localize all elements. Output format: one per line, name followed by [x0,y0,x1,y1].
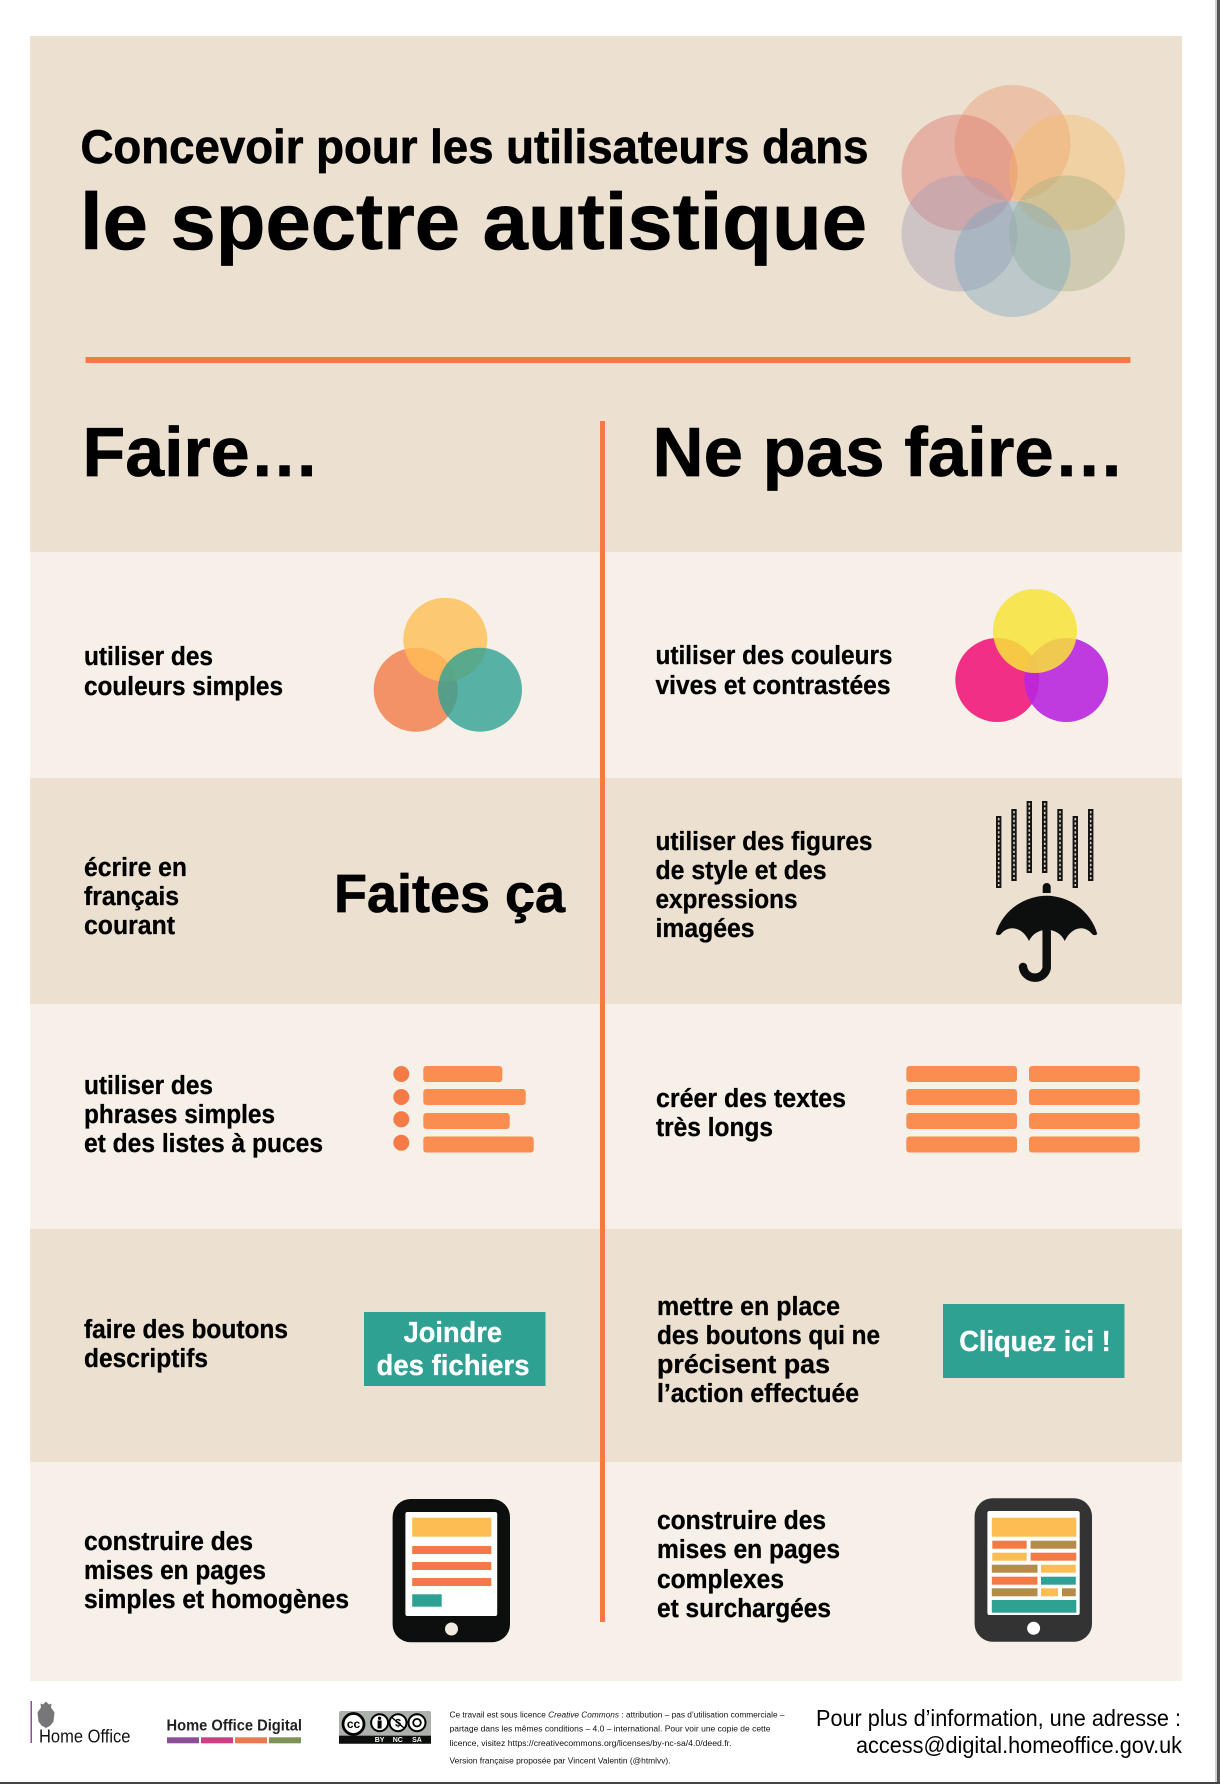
licence text: Ce travail est sous licence Creative Commons : attribution – pas d’utilisation commerciale – [450,1710,785,1719]
badge: Creative Commons licence [339,1711,431,1744]
icon: tablet with simple layout [393,1499,510,1642]
vertical orange divider [600,421,605,1622]
text: complex layouts: mises en pages [657,1536,840,1564]
icon: muted colour circles [374,598,522,732]
icon: tablet with cluttered layout [975,1498,1092,1642]
text: vague buttons: des boutons qui ne [657,1322,880,1350]
text: complex layouts: et surchargées [657,1595,831,1623]
text: plain French: courant [84,912,175,940]
icon: crest [38,1702,54,1728]
text: bright contrasting colours: vives et contrastées [656,672,890,700]
icon: bullet list [393,1066,534,1152]
text: short sentences and bullets: et des listes à puces [84,1130,323,1158]
icon: flower of overlapping circles [902,85,1125,317]
panel: header background [30,36,1182,552]
horizontal orange divider [86,357,1130,363]
logo: Home Office Digital: Home Office Digital [166,1718,302,1734]
text: simple layouts [84,1528,349,1614]
text: vague buttons: mettre en place [657,1293,840,1321]
icon: bright colour circles [955,589,1108,722]
text: simple layouts: construire des [84,1528,253,1556]
heading: Ne pas faire: Ne pas faire… [652,413,1124,491]
text: descriptive buttons: descriptifs [84,1345,208,1373]
title: Concevoir pour les utilisateurs dans [80,120,868,173]
panel: row 2 background [30,778,1182,1004]
text: simple layouts: simples et homogènes [84,1586,349,1614]
button: vague example: Cliquez ici ! [959,1326,1111,1358]
panel: row 1 background [30,552,1182,778]
text: plain French: français [84,883,179,911]
text: simple colours [84,643,283,701]
text: vague buttons: précisent pas [657,1351,830,1379]
text: short sentences and bullets: utiliser des [84,1072,213,1100]
text: very long texts [656,1085,846,1142]
licence text: partage dans les mêmes conditions – 4.0 – international. Pour voir une copie de cette [450,1725,771,1734]
text: figures of speech: utiliser des figures [656,828,872,856]
contact information: access@digital.homeoffice.gov.uk [856,1732,1182,1758]
badge: Creative Commons licence: BY [375,1737,385,1744]
text: complex layouts: construire des [657,1507,826,1535]
badge: Creative Commons licence: $ [395,1718,401,1730]
text: plain French: écrire en [84,854,187,882]
text: simple colours: utiliser des [84,643,213,671]
badge: Creative Commons licence: NC [393,1737,403,1744]
text: vague buttons [657,1293,880,1408]
licence text: licence, visitez https://creativecommons.org/licenses/by-nc-sa/4.0/deed.fr. [450,1739,732,1748]
panel: row 5 background [30,1462,1182,1681]
panel: row 4 background [30,1229,1182,1462]
button: descriptive example: Joindre [404,1317,502,1349]
licence text: Version française proposée par Vincent Valentin (@htmlvv). [450,1756,670,1766]
text: complex layouts [657,1507,840,1623]
logo: Home Office Digital [166,1718,302,1743]
text: descriptive buttons [84,1316,288,1373]
title: le spectre autistique [80,177,867,266]
text: very long texts: très longs [656,1114,773,1142]
logo: Home Office [30,1701,130,1746]
button: vague example [943,1304,1124,1378]
text: simple colours: couleurs simples [84,673,283,701]
badge: Creative Commons licence: cc [347,1717,360,1731]
example: plain wording: Faites ça [334,864,566,924]
badge: Creative Commons licence: SA [412,1737,422,1744]
heading: Faire: Faire… [82,413,320,491]
text: complex layouts: complexes [657,1566,784,1594]
contact information [816,1705,1182,1758]
licence text [450,1710,785,1766]
panel: row 3 background [30,1004,1182,1229]
icon: two blocks of long text bars [906,1066,1140,1152]
text: figures of speech [656,828,872,943]
text: figures of speech: expressions [656,886,798,914]
icon: raining umbrella [996,801,1097,978]
text: plain French [84,854,187,940]
text: vague buttons: l’action effectuée [657,1380,859,1408]
button: descriptive example: des fichiers [376,1350,530,1382]
text: descriptive buttons: faire des boutons [84,1316,288,1344]
text: figures of speech: de style et des [656,857,826,885]
title [80,120,868,266]
text: simple layouts: mises en pages [84,1557,266,1585]
logo: Home Office: Home Office [39,1726,130,1746]
text: figures of speech: imagées [656,915,754,943]
text: bright contrasting colours: utiliser des couleurs [656,642,892,670]
text: very long texts: créer des textes [656,1085,846,1113]
text: short sentences and bullets [84,1072,323,1158]
button: descriptive example [364,1312,546,1386]
text: bright contrasting colours [656,642,892,700]
text: short sentences and bullets: phrases simples [84,1101,275,1129]
contact information: Pour plus d’information, une adresse : [816,1705,1181,1731]
